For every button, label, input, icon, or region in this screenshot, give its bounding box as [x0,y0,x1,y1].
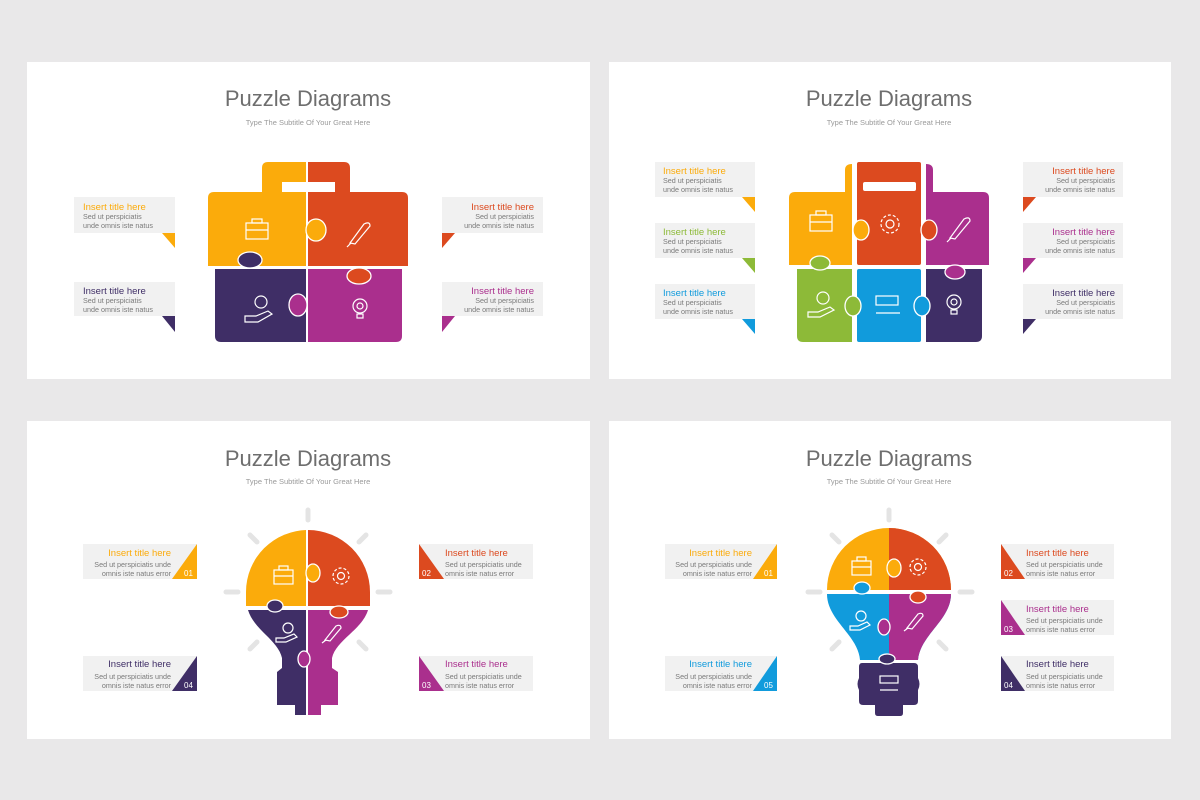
title: Puzzle Diagrams [806,86,972,111]
callout: left 2 [74,282,175,332]
icon: gear [910,559,926,575]
callout: 03: omnis iste natus error [1026,625,1096,634]
callout: left 2: unde omnis iste natus [663,246,733,255]
callout: right 1: Insert title here [471,202,534,213]
callout: 02 [419,544,533,579]
icon: briefcase [810,211,832,231]
callout: right 2: Insert title here [1052,227,1115,238]
briefcase puzzle [208,162,408,344]
callout: 01: Insert title here [108,548,171,559]
callout: 02: 02 [422,569,431,578]
callout: right 1: Sed ut perspiciatis [1056,176,1115,185]
callout: left 2: Sed ut perspiciatis [83,296,142,305]
callout: right 1: Sed ut perspiciatis [475,212,534,221]
callout: left 2 [655,223,755,273]
callout: 01 [665,544,777,579]
icon: rocket [904,613,923,631]
callout: 03 [1001,600,1114,635]
callout: left 1: unde omnis iste natus [663,185,733,194]
callout: left 3: Sed ut perspiciatis [663,298,722,307]
subtitle: Type The Subtitle Of Your Great Here [246,477,370,486]
icon: rocket [347,223,370,247]
callout: left 1 [74,197,175,248]
callout: 02: 02 [1004,569,1013,578]
callout: 03: 03 [422,681,431,690]
tab knobs [306,219,326,241]
six-piece puzzle [789,162,989,342]
callout: right 1: unde omnis iste natus [1045,185,1115,194]
icon: presentation [880,676,898,690]
icon: money hand [850,611,870,630]
callout: left 3: Insert title here [663,288,726,299]
callout: right 2 [442,282,543,332]
callout: left 2: Insert title here [83,286,146,297]
callout: 02: Sed ut perspiciatis unde [1026,560,1103,569]
callout: 04: omnis iste natus error [102,681,172,690]
subtitle: Type The Subtitle Of Your Great Here [827,477,951,486]
icon: briefcase [852,557,871,575]
callout: left 2: unde omnis iste natus [83,305,153,314]
callout: 04: Sed ut perspiciatis unde [94,672,171,681]
callout: right 1 [1023,162,1123,212]
callout: 03: Sed ut perspiciatis unde [1026,616,1103,625]
bulb puzzle [246,530,370,715]
title: Puzzle Diagrams [225,446,391,471]
callout: 02: omnis iste natus error [445,569,515,578]
callout: 02: Insert title here [1026,548,1089,559]
callout: right 3: Insert title here [1052,288,1115,299]
callout: left 1: Sed ut perspiciatis [83,212,142,221]
callout: 05 [665,656,777,691]
callout: 05: 05 [764,681,773,690]
callout: 01: 01 [764,569,773,578]
icon: money hand [808,292,834,317]
panel: slide 1 briefcase [27,62,590,379]
callout: 04: Insert title here [108,659,171,670]
callout: 02 [1001,544,1114,579]
panel: slide 4 bulb five pieces [609,421,1171,739]
callout: right 2: unde omnis iste natus [464,305,534,314]
callout: 04: omnis iste natus error [1026,681,1096,690]
rays [226,510,390,649]
callout: 04: Sed ut perspiciatis unde [1026,672,1103,681]
callout: 02: omnis iste natus error [1026,569,1096,578]
callout: left 1 [655,162,755,212]
callout: right 1: unde omnis iste natus [464,221,534,230]
callout: left 3 [655,284,755,334]
icon: gear [881,215,899,233]
callout: 03: omnis iste natus error [445,681,515,690]
callout: 04 [83,656,197,691]
tab knobs [853,220,869,240]
callout: 03: Insert title here [445,659,508,670]
title: Puzzle Diagrams [806,446,972,471]
callout: 01: omnis iste natus error [683,569,753,578]
callout: right 2 [1023,223,1123,273]
panel: slide 3 bulb four pieces [27,421,590,739]
icon: bulb gear [947,295,961,314]
callout: 01: omnis iste natus error [102,569,172,578]
callout: 04: Insert title here [1026,659,1089,670]
callout: 05: omnis iste natus error [683,681,753,690]
panel: slide 2 six-piece briefcase [609,62,1171,379]
callout: 04: 04 [1004,681,1013,690]
callout: left 2: Insert title here [663,227,726,238]
title: Puzzle Diagrams [225,86,391,111]
callout: right 2: Insert title here [471,286,534,297]
callout: left 1: Insert title here [663,166,726,177]
callout: 03: Sed ut perspiciatis unde [445,672,522,681]
callout: 01 [83,544,197,579]
tab knobs [306,564,320,582]
callout: right 3 [1023,284,1123,334]
callout: 03 [419,656,533,691]
icon: bulb gear [353,299,367,318]
icon: presentation [876,296,900,313]
callout: 02: Sed ut perspiciatis unde [445,560,522,569]
subtitle: Type The Subtitle Of Your Great Here [246,118,370,127]
icon: rocket [322,625,341,643]
icon: money hand [245,296,272,322]
callout: left 3: unde omnis iste natus [663,307,733,316]
callout: 04: 04 [184,681,193,690]
callout: right 1: Insert title here [1052,166,1115,177]
callout: 02: Insert title here [445,548,508,559]
callout: left 1: Sed ut perspiciatis [663,176,722,185]
icon: gear [333,568,349,584]
callout: 05: Insert title here [689,659,752,670]
callout: left 2: Sed ut perspiciatis [663,237,722,246]
callout: 01: Insert title here [689,548,752,559]
tab knobs [887,559,901,577]
icon: briefcase [274,566,293,584]
icon: rocket [947,218,970,242]
icon: briefcase [246,219,268,239]
callout: right 3: unde omnis iste natus [1045,307,1115,316]
callout: 01: Sed ut perspiciatis unde [94,560,171,569]
icon: money hand [276,623,297,642]
rays [808,510,972,649]
callout: right 2: Sed ut perspiciatis [1056,237,1115,246]
callout: left 1: unde omnis iste natus [83,221,153,230]
callout: right 2: unde omnis iste natus [1045,246,1115,255]
callout: 04 [1001,656,1114,691]
callout: right 1 [442,197,543,248]
callout: 03: Insert title here [1026,604,1089,615]
callout: 03: 03 [1004,625,1013,634]
callout: 01: Sed ut perspiciatis unde [675,560,752,569]
bulb puzzle [827,528,951,716]
callout: left 1: Insert title here [83,202,146,213]
callout: right 2: Sed ut perspiciatis [475,296,534,305]
subtitle: Type The Subtitle Of Your Great Here [827,118,951,127]
callout: 05: Sed ut perspiciatis unde [675,672,752,681]
callout: 01: 01 [184,569,193,578]
callout: right 3: Sed ut perspiciatis [1056,298,1115,307]
